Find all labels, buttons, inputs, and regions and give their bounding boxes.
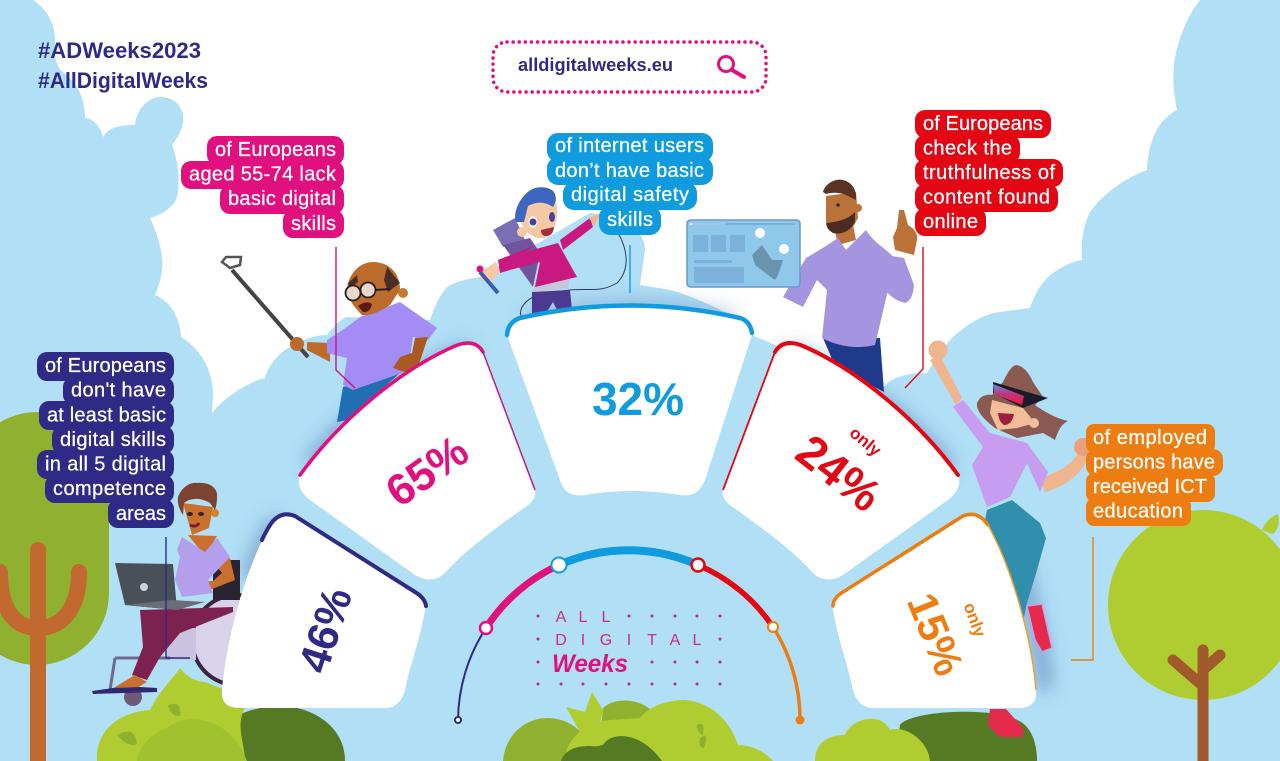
character: older man with selfie stick [222, 257, 437, 422]
hashtags: #AllDigitalWeeks [38, 68, 208, 93]
All Digital Weeks logo: D [555, 632, 567, 649]
panel: 32% wedge: 32% [592, 373, 684, 425]
label: 15% caption [1086, 424, 1223, 526]
character: woman in wheelchair [92, 483, 282, 706]
panel: 15% wedge: 15% [898, 586, 973, 682]
right tree [1108, 510, 1280, 761]
character: man with virtual screen [687, 180, 917, 392]
All Digital Weeks logo: I [581, 632, 585, 649]
All Digital Weeks logo: Weeks [552, 650, 628, 678]
label: 15% caption: persons have [1093, 452, 1215, 474]
label: 46% caption: at least basic [47, 404, 166, 426]
bushes: left [97, 668, 345, 761]
label: 46% caption: of Europeans [45, 355, 166, 377]
label: 32% caption: skills [607, 209, 653, 231]
icon: magnifier [718, 56, 744, 77]
label: 24% caption: of Europeans [923, 113, 1043, 135]
label: 46% caption: areas [116, 503, 166, 525]
All Digital Weeks logo: L [602, 609, 611, 626]
label: 24% caption: content found [923, 186, 1050, 208]
panel: 15% wedge [833, 514, 1036, 708]
leader line: orange [1071, 537, 1093, 660]
hashtags [38, 38, 208, 93]
label: 46% caption: in all 5 digital [45, 454, 166, 476]
panel: 65% wedge: 65% [377, 426, 477, 517]
leader line: blue [629, 245, 631, 293]
panel: 24% wedge: only [846, 423, 885, 460]
bushes: right [815, 712, 1037, 761]
All Digital Weeks logo: A [556, 609, 567, 626]
semicircular progress arc [455, 550, 804, 724]
panel: 46% wedge [222, 514, 426, 708]
bushes: center [503, 692, 773, 761]
label: 24% caption: online [923, 211, 978, 233]
panel: 46% wedge: 46% [290, 582, 362, 679]
label: 46% caption [37, 352, 174, 528]
label: 46% caption: don't have [71, 380, 166, 402]
label: 32% caption: don’t have basic [555, 160, 704, 182]
label: 32% caption: digital safety [571, 184, 689, 206]
All Digital Weeks logo: G [600, 632, 612, 649]
panel: 65% wedge [299, 343, 535, 580]
All Digital Weeks logo: L [579, 609, 588, 626]
label: 65% caption [181, 136, 344, 238]
label: 24% caption [915, 110, 1063, 236]
All Digital Weeks logo: A [670, 632, 681, 649]
All Digital Weeks logo: L [693, 632, 702, 649]
All Digital Weeks logo [536, 609, 722, 686]
label: 15% caption: of employed [1093, 427, 1207, 449]
leader line: pink [336, 247, 355, 388]
label: 32% caption: of internet users [555, 135, 704, 157]
label: 15% caption: received ICT [1093, 476, 1207, 498]
label: 65% caption: aged 55-74 lack [189, 164, 337, 186]
panel: 32% wedge [507, 306, 752, 495]
label: 65% caption: skills [291, 213, 336, 235]
white sky with cloud silhouettes [33, 0, 1200, 413]
leader line: red [905, 247, 923, 388]
character: boy with backpack [476, 187, 626, 318]
search bar: alldigitalweeks.eu [518, 55, 673, 75]
panel: 15% wedge: only [960, 600, 990, 640]
label: 24% caption: truthfulness of [923, 162, 1055, 184]
character: woman with VR headset [928, 340, 1092, 700]
search bar [493, 42, 766, 92]
label: 65% caption: of Europeans [215, 139, 336, 161]
label: 65% caption: basic digital [228, 188, 336, 210]
label: 24% caption: check the [923, 138, 1012, 160]
label: 46% caption: competence [53, 478, 166, 500]
All Digital Weeks logo: I [627, 632, 631, 649]
label: 32% caption [547, 133, 713, 235]
foot of VR woman below the wedge [988, 709, 1023, 737]
wedge shadows [250, 308, 1045, 690]
leader line: navy [166, 537, 190, 658]
panel: 24% wedge [723, 343, 959, 580]
hashtags: #ADWeeks2023 [38, 38, 201, 63]
label: 46% caption: digital skills [60, 429, 166, 451]
panel: 24% wedge: 24% [787, 424, 891, 522]
label: 15% caption: education [1093, 500, 1183, 522]
left tree [0, 412, 109, 761]
All Digital Weeks logo: T [647, 632, 657, 649]
